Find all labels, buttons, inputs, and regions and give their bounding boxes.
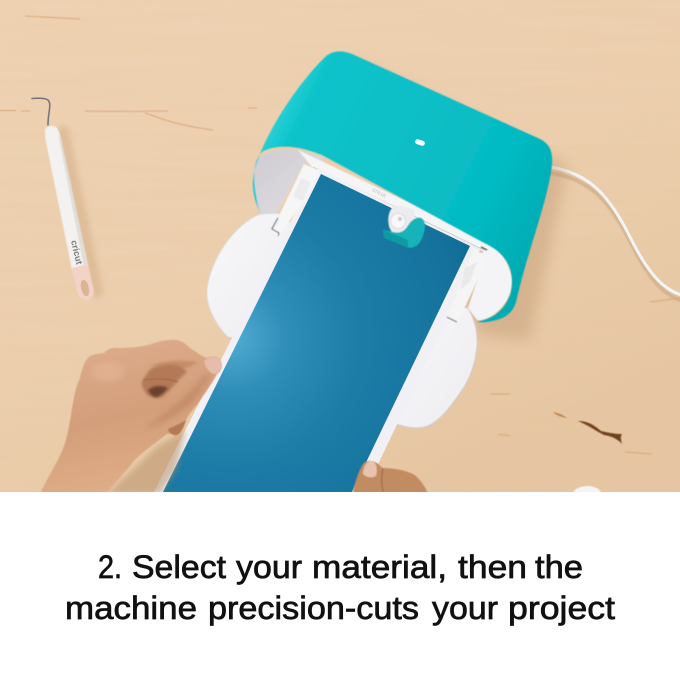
wooden table background [0, 0, 680, 492]
caption [65, 549, 615, 626]
caption line 1: 2. [98, 549, 122, 585]
caption line 2: project [508, 590, 615, 626]
tool loop hole [80, 280, 90, 296]
material: blue vinyl [159, 174, 470, 500]
caption line 2: precision-cuts [208, 590, 419, 626]
white lip under body [298, 150, 512, 280]
cutting carriage [383, 207, 425, 248]
left guide [272, 164, 320, 237]
caption line 1: Select [132, 549, 226, 585]
finger gap [142, 365, 187, 398]
caption line 1: then [458, 549, 527, 585]
right inner cap [468, 248, 512, 320]
caption line 1: your [236, 549, 302, 585]
machine: teal body [253, 51, 552, 322]
caption line 2: your [432, 590, 498, 626]
wood knot [553, 412, 622, 444]
machine shadow [466, 154, 572, 342]
right guide [447, 247, 488, 322]
machine: status light [415, 139, 425, 146]
power cord [550, 167, 680, 301]
right paper tray [392, 305, 477, 428]
left hand [40, 340, 222, 494]
tool: weeding hook [32, 98, 97, 300]
finger creases [143, 379, 178, 382]
carriage wheel [390, 214, 406, 228]
thumb shade [151, 374, 209, 426]
right hand fingers [352, 461, 428, 494]
material: white liner [150, 168, 480, 500]
tool handle shade [58, 133, 88, 267]
hand base shape [40, 340, 222, 494]
lower small finger [168, 420, 186, 435]
left inner cap [253, 149, 330, 214]
tool hook tip [32, 98, 50, 125]
carriage white housing [388, 207, 415, 234]
index finger shade [150, 361, 198, 369]
slot dark line [313, 167, 484, 250]
finger gap dark [148, 386, 168, 397]
left paper tray [207, 213, 300, 340]
machine: logo on lip: cricut [371, 187, 387, 199]
finger crease [382, 468, 384, 494]
caption line 1: material, [312, 549, 447, 585]
caption line 1: the [535, 549, 583, 585]
small white object at bottom edge [572, 486, 602, 494]
photo: cutting machine on wooden table [0, 0, 680, 500]
hand shadow on table [107, 430, 186, 494]
tool pink grip [72, 264, 94, 300]
thumbnail [204, 357, 221, 374]
caption line 1 [98, 549, 583, 585]
machine: inner cavity [253, 149, 512, 320]
caption line 2: machine [65, 590, 197, 626]
tool handle [45, 126, 88, 270]
carriage teal clamp [383, 218, 425, 248]
tool logo: cricut [69, 239, 84, 265]
caption line 2 [65, 590, 615, 626]
right thumbnail [363, 461, 377, 477]
knuckle highlight [96, 365, 121, 380]
